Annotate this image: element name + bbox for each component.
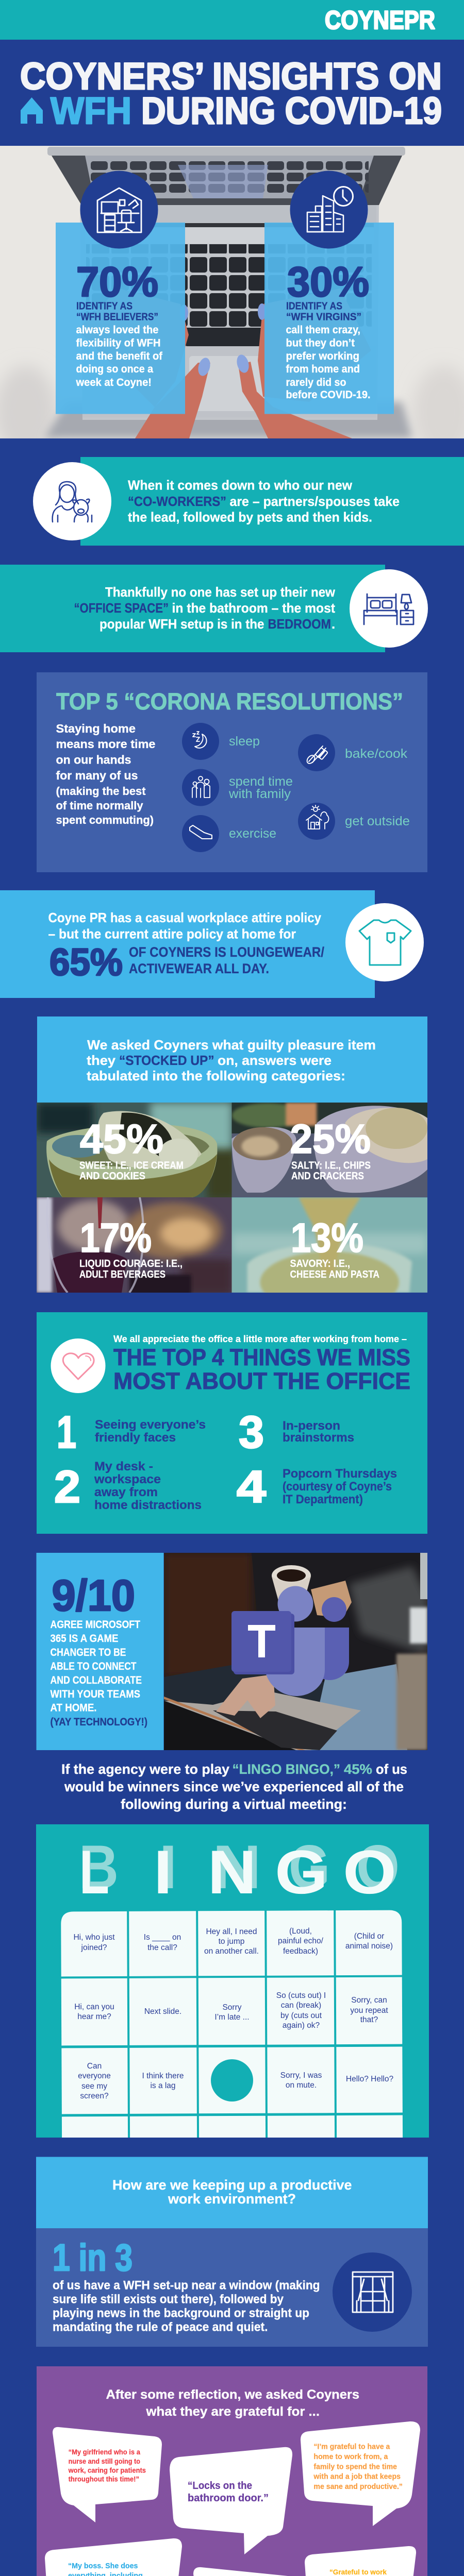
photo: person with coffee and laptop [164, 1553, 427, 1750]
panel: WFH virgins [264, 171, 394, 414]
text: believers description [76, 301, 163, 388]
bingo cell text: I think there [142, 2072, 184, 2080]
text: office space: popular WFH setup is in the [100, 616, 264, 632]
label: savory: CHEESE AND PASTA [290, 1269, 379, 1280]
panel: office space [0, 565, 428, 652]
heading: top 4 things [113, 1344, 410, 1394]
text: co-workers [128, 477, 400, 524]
text: window set-up: mandating the rule of peace and quiet. [53, 2320, 268, 2334]
title [20, 56, 442, 132]
bingo cell text: Is ____ on [144, 1933, 181, 1942]
stat: 25% salty: 25% [290, 1116, 371, 1162]
icon: window [333, 2252, 412, 2332]
bingo cell text: screen? [80, 2092, 109, 2100]
text: staying home: Staying home [56, 722, 136, 735]
panel: 9/10 microsoft teams [36, 1553, 164, 1750]
stat: 30%: 30% [287, 259, 369, 306]
resolution: sleep [182, 723, 260, 760]
text: virgins description: rarely did so [286, 377, 346, 388]
icon: home office circle [80, 171, 158, 248]
icon: bed and nightstand [350, 569, 428, 648]
title: WFH [51, 90, 131, 132]
bingo cell text: Hello? Hello? [346, 2075, 393, 2083]
text: stocked up: they [87, 1053, 116, 1068]
text: virgins description: but they don’t [286, 337, 355, 349]
bingo cell text: I’m late ... [214, 2013, 250, 2022]
bingo cell text: see my [81, 2082, 107, 2091]
speech bubble: girlfriend nurse [53, 2427, 162, 2522]
text: stocked up [87, 1037, 376, 1083]
text: believers description: doing so once a [76, 363, 153, 375]
text: lingo bingo intro: following during a virtual meeting: [121, 1797, 347, 1812]
speech bubble: my boss: “My boss. She does [68, 2562, 138, 2570]
bingo free space dot [211, 2059, 253, 2102]
bingo cell text: Hi, who just [73, 1933, 115, 1942]
bingo cell text: So (cuts out) I [276, 1991, 326, 2000]
text: agree microsoft [51, 1619, 147, 1728]
text: window set-up [53, 2278, 320, 2334]
heading: bingo letters: I [154, 1838, 172, 1907]
text: office space [74, 584, 336, 632]
text: stocked up: “STOCKED UP” [119, 1053, 214, 1068]
panel: bingo card [36, 1824, 429, 2147]
bingo cell text: again) ok? [283, 2021, 320, 2030]
food tile: liquid courage 17% [37, 1197, 233, 1295]
resolution: spend time with family: with family [228, 787, 291, 801]
bingo cell text: everyone [78, 2072, 111, 2080]
item 3 [239, 1406, 354, 1458]
icon: office building and clock circle [290, 171, 368, 248]
speech bubble: grateful to have a home: with and a job that keeps [313, 2472, 401, 2481]
text: loungewear: OF COYNERS IS LOUNGEWEAR/ [129, 944, 324, 960]
text: appreciate the office: We all appreciate the office a little more after working from home – [113, 1334, 407, 1344]
text: office space: in the bathroom – the most [172, 600, 335, 616]
text: lingo bingo intro: of us [376, 1761, 407, 1777]
speech bubble: grateful to have a home: family to spend the time [313, 2463, 397, 2471]
speech bubble: grateful to have a home: “I’m grateful to have a [313, 2442, 390, 2451]
item 4: (courtesy of Coyne’s [283, 1480, 392, 1494]
bingo cell text: on another call. [204, 1947, 259, 1956]
panel: WFH believers [56, 171, 185, 414]
item 2: 2 [54, 1461, 80, 1512]
text: agree microsoft: AT HOME. [51, 1702, 97, 1714]
icon: house [21, 97, 43, 124]
speech bubble: girlfriend nurse: throughout this time!” [69, 2475, 139, 2483]
heading: top 4 things: MOST ABOUT THE OFFICE [113, 1368, 410, 1394]
resolution: spend time with family [182, 769, 293, 806]
text: agree microsoft: ABLE TO CONNECT [51, 1660, 137, 1672]
resolution: exercise [182, 815, 276, 852]
text: co-workers: are – partners/spouses take [230, 494, 400, 509]
heading: productive: How are we keeping up a productive [112, 2177, 352, 2193]
item 2 [54, 1460, 202, 1512]
stat: 9/10: 9/10 [52, 1571, 135, 1620]
text: virgins description [286, 301, 370, 401]
text: lingo bingo intro: would be winners since we’ve experienced all of the [64, 1779, 404, 1794]
speech bubble: locks on door: “Locks on the [188, 2480, 252, 2492]
text: office space: . [332, 616, 335, 632]
item 2: home distractions [94, 1498, 202, 1512]
bingo cell text: the call? [147, 1943, 177, 1952]
stat: 45% sweet: 45% [80, 1116, 163, 1162]
speech bubble: girlfriend nurse: nurse and still going to [69, 2458, 140, 2465]
bingo cell text: to jump [219, 1937, 244, 1946]
item 2: My desk - [94, 1460, 153, 1473]
resolution: sleep: sleep [229, 734, 260, 749]
item 4: Popcorn Thursdays [283, 1467, 397, 1481]
heading: bingo letters: I [159, 1833, 177, 1902]
food tile: sweet 45% [37, 1103, 238, 1200]
speech bubble: grateful to have a home: me sane and productive.” [313, 2482, 403, 2491]
resolution: spend time with family: spend time [229, 774, 293, 789]
text: believers description: flexibility of WFH [76, 337, 161, 349]
heading: bingo letters: O [356, 1833, 400, 1902]
stat: 13% savory: 13% [291, 1215, 363, 1261]
hero photo: laptop on lap [0, 146, 464, 438]
heading: grateful: what they are grateful for ... [145, 2404, 320, 2419]
stat: 70%: 70% [76, 259, 158, 306]
text: stocked up: tabulated into the following categories: [87, 1068, 345, 1083]
heading: bingo letters: O [343, 1838, 396, 1907]
bingo cell text: by (cuts out [280, 2011, 322, 2020]
resolution: bake/cook: bake/cook [345, 747, 408, 761]
item 3: brainstorms [283, 1431, 354, 1445]
speech bubble: girlfriend nurse: work, caring for patients [68, 2467, 146, 2474]
text: virgins description: before COVID-19. [286, 389, 370, 401]
text: virgins description: call them crazy, [286, 324, 360, 336]
text: lingo bingo intro: If the agency were to play [61, 1761, 229, 1777]
text: loungewear: ACTIVEWEAR ALL DAY. [129, 961, 269, 976]
title: COYNERS’ INSIGHTS ON [20, 56, 442, 97]
resolution: exercise: exercise [229, 826, 276, 841]
bingo cell text: (Child or [354, 1932, 384, 1941]
text: staying home: for many of us [56, 769, 138, 782]
text: agree microsoft: CHANGER TO BE [51, 1647, 126, 1658]
label: liquid courage [79, 1258, 183, 1280]
resolution: get outside: get outside [345, 814, 410, 828]
icon: woman and dog [33, 462, 111, 540]
text: window set-up: playing news in the background or straight up [53, 2306, 309, 2320]
bingo cell text: Sorry, can [351, 1996, 387, 2005]
panel: stocked up [37, 1016, 427, 1103]
item 3: 3 [239, 1406, 264, 1458]
label: salty [291, 1160, 371, 1182]
text: staying home: of time normally [56, 799, 143, 812]
text: loungewear [129, 944, 324, 976]
bingo cell text: on mute. [286, 2081, 317, 2090]
text: window set-up: sure life still exists out there), followed by [53, 2293, 284, 2306]
label: savory: SAVORY: I.E., [290, 1258, 350, 1269]
panel: productive work environment [36, 2157, 428, 2347]
text: virgins description: IDENTIFY AS [286, 301, 342, 312]
speech bubble: family safe [193, 2567, 301, 2576]
speech bubble: locks on door: bathroom door.” [188, 2492, 269, 2504]
logo: Coyne PR: COYNEPR [325, 6, 435, 35]
bingo cell text: Next slide. [144, 2007, 181, 2016]
heading: bingo letters: L [79, 1838, 109, 1907]
speech bubble: grateful to work: “Grateful to work [329, 2568, 387, 2576]
text: agree microsoft: 365 IS A GAME [51, 1633, 119, 1645]
text: staying home: (making the best [56, 785, 146, 798]
speech bubble: locks on door [170, 2447, 292, 2554]
speech bubble: grateful to work [305, 2546, 416, 2576]
text: lingo bingo intro: “LINGO BINGO,” [232, 1761, 340, 1777]
bingo cell text: feedback) [283, 1947, 318, 1956]
bingo cell text: is a lag [150, 2081, 176, 2090]
item 3: In-person [283, 1419, 340, 1433]
speech bubble: girlfriend nurse: “My girlfriend who is a [69, 2448, 140, 2456]
text: office space: BEDROOM [268, 616, 331, 632]
bingo cell text: joined? [80, 1943, 107, 1952]
text: believers description: and the benefit of [76, 350, 163, 362]
text: agree microsoft: AGREE MICROSOFT [51, 1619, 140, 1631]
bingo cell text: Sorry, I was [280, 2071, 322, 2080]
item 4: 4 [237, 1461, 266, 1512]
item 4 [237, 1461, 397, 1512]
text: window set-up: of us have a WFH set-up near a window (making [53, 2278, 320, 2293]
icon: t-shirt [345, 903, 424, 981]
text: office space: “OFFICE SPACE” [74, 600, 169, 616]
text: office space: Thankfully no one has set up their new [105, 584, 336, 600]
label: sweet [79, 1160, 184, 1182]
stat: 1 in 3: 1 in 3 [53, 2237, 132, 2279]
text: attire intro: – but the current attire policy at home for [48, 926, 296, 942]
text: staying home: on our hands [56, 753, 131, 767]
bingo cell text: (Loud, [289, 1927, 312, 1936]
speech bubble: grateful to have a home: home to work from, a [313, 2452, 388, 2461]
icon: microsoft teams logo [231, 1586, 349, 1696]
panel: top 5 corona resolutions [37, 672, 427, 872]
title: DURING COVID-19 [141, 90, 442, 132]
text: virgins description: prefer working [286, 350, 359, 362]
text: co-workers: “CO-WORKERS” [128, 494, 226, 509]
item 2: workspace [94, 1472, 161, 1486]
icon: heart [51, 1338, 105, 1393]
item 1: 1 [57, 1406, 76, 1458]
text: believers description: IDENTIFY AS [76, 301, 132, 312]
text: stocked up: We asked Coyners what guilty pleasure item [87, 1037, 376, 1053]
bingo cell text: can (break) [281, 2001, 321, 2010]
bingo cell text: Hi, can you [74, 2003, 114, 2011]
header bar with logo [0, 0, 464, 40]
text: lingo bingo intro: 45% [344, 1761, 372, 1777]
label: sweet: AND COOKIES [79, 1171, 145, 1182]
text: staying home: means more time [56, 737, 156, 751]
text: agree microsoft: (YAY TECHNOLOGY!) [51, 1716, 147, 1728]
text: staying home: spent commuting) [56, 814, 154, 826]
label: liquid courage: ADULT BEVERAGES [79, 1269, 165, 1280]
heading: grateful [106, 2387, 359, 2419]
text: co-workers: When it comes down to who our new [128, 477, 353, 493]
heading: bingo letters: G [275, 1838, 328, 1907]
food tile: savory 13% [232, 1197, 427, 1313]
item 1: Seeing everyone’s [95, 1418, 206, 1432]
heading: bingo letters: G [289, 1833, 330, 1902]
text: believers description: week at Coyne! [76, 377, 152, 388]
text: staying home [56, 722, 156, 826]
text: agree microsoft: AND COLLABORATE [51, 1674, 142, 1686]
text: agree microsoft: WITH YOUR TEAMS [51, 1688, 140, 1700]
text: stocked up: on, answers were [218, 1053, 332, 1068]
food tile: salty 25% [232, 1103, 427, 1197]
panel: top 4 things we miss [37, 1312, 427, 1534]
label: liquid courage: LIQUID COURAGE: I.E., [79, 1258, 183, 1269]
heading: grateful: After some reflection, we asked Coyners [106, 2387, 359, 2402]
panel: grateful for [37, 2366, 427, 2576]
resolution: bake/cook [298, 734, 408, 771]
heading: bingo letters: N [208, 1838, 257, 1907]
speech bubble: my boss [45, 2538, 182, 2576]
stat: 17% liquid courage: 17% [80, 1215, 152, 1261]
item 1 [57, 1406, 206, 1458]
bingo cell text: that? [360, 2015, 378, 2024]
item 4: IT Department) [283, 1493, 363, 1506]
bingo cell text: animal noise) [345, 1942, 393, 1951]
heading: bingo letters [79, 1833, 400, 1907]
bingo cell text: Hey all, I need [206, 1927, 257, 1936]
text: virgins description: from home and [286, 363, 360, 375]
bingo cell text: you repeat [350, 2006, 388, 2015]
stat: 65%: 65% [49, 941, 123, 984]
text: virgins description: “WFH VIRGINS” [286, 311, 361, 323]
label: sweet: SWEET: I.E., ICE CREAM [79, 1160, 184, 1172]
bingo cell text: Can [87, 2062, 102, 2071]
item 1: friendly faces [95, 1431, 176, 1445]
text: lingo bingo intro [61, 1761, 407, 1812]
bingo cell text: Sorry [222, 2003, 242, 2012]
speech bubble: grateful to have a home [301, 2421, 420, 2526]
bingo cell text [73, 1927, 393, 2100]
bingo cell text: hear me? [77, 2012, 111, 2021]
heading: bingo letters: B [79, 1833, 119, 1902]
item 2: away from [94, 1485, 158, 1499]
heading: top 5: TOP 5 “CORONA RESOLUTIONS” [56, 688, 403, 715]
panel: attire policy [0, 890, 424, 998]
label: savory [290, 1258, 379, 1280]
label: salty: SALTY: I.E., CHIPS [291, 1160, 371, 1172]
heading: productive [112, 2177, 352, 2207]
heading: productive: work environment? [168, 2191, 296, 2207]
heading: bingo letters: N [212, 1833, 261, 1902]
resolution: get outside [298, 803, 410, 840]
text: co-workers: the lead, followed by pets and then kids. [128, 509, 372, 524]
text: believers description: always loved the [76, 324, 159, 336]
text: attire intro [48, 910, 321, 942]
text: believers description: “WFH BELIEVERS” [76, 311, 158, 323]
bingo cell text: painful echo/ [278, 1937, 324, 1945]
text: attire intro: Coyne PR has a casual workplace attire policy [48, 910, 321, 925]
bingo grid cells [61, 1910, 403, 2138]
hands [135, 363, 210, 438]
panel: co-workers [33, 457, 464, 546]
label: salty: AND CRACKERS [291, 1171, 364, 1182]
heading: top 4 things: THE TOP 4 THINGS WE MISS [113, 1344, 410, 1370]
